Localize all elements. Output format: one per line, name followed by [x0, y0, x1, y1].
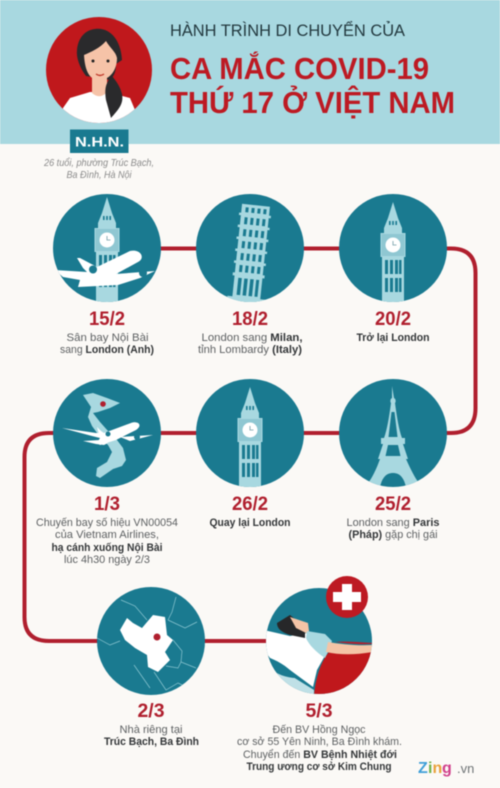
stop 2: 18/2: 18/2	[232, 309, 268, 330]
stop 3: 20/2: Trở lại London	[356, 332, 430, 344]
stop 3: 20/2	[339, 194, 447, 344]
header band	[0, 0, 500, 144]
name tag: N.H.N.	[75, 134, 124, 150]
icon: Hanoi map	[97, 597, 197, 690]
title: HÀNH TRÌNH DI CHUYỂN CỦA	[170, 21, 406, 40]
stop 7: 2/3	[97, 587, 205, 748]
patient details	[43, 157, 154, 181]
stop 2: 18/2	[196, 194, 304, 356]
stop 1: 15/2: Sân bay Nội Bài	[66, 332, 148, 344]
title: THỨ 17 Ở VIỆT NAM	[170, 84, 455, 120]
stop 7: 2/3: Trúc Bạch, Ba Đình	[104, 736, 199, 748]
stop 6: 1/3: Chuyến bay số hiệu VN00054	[36, 517, 178, 529]
stop 4: 25/2: 25/2	[375, 494, 411, 515]
stop 8: 5/3: 5/3	[306, 701, 332, 722]
name tag	[70, 130, 128, 153]
stop 6: 1/3: 1/3	[94, 494, 120, 515]
logo: Zing.vn: Z	[418, 760, 428, 777]
icon: airplane	[55, 251, 155, 287]
stop 7: 2/3: 2/3	[138, 701, 164, 722]
stop 4: 25/2: London sang Paris	[346, 517, 440, 529]
patient details: Ba Đình, Hà Nội	[66, 169, 132, 181]
stop 8: 5/3: Chuyển đến BV Bệnh Nhiệt đới	[243, 749, 397, 761]
stop 7: 2/3: Nhà riêng tại	[120, 724, 182, 736]
logo: Zing.vn: n	[432, 760, 442, 777]
icon: patient in hospital bed	[262, 615, 374, 700]
logo: Zing.vn: .vn	[457, 761, 474, 776]
icon: airplane	[62, 422, 153, 445]
stop 5: 26/2: 26/2	[232, 494, 268, 515]
avatar: patient portrait	[46, 17, 152, 125]
stop 1: 15/2: 15/2	[89, 309, 125, 330]
title	[170, 21, 455, 120]
stop 6: 1/3: hạ cánh xuống Nội Bài	[52, 542, 162, 554]
stop 8: 5/3: cơ sở 55 Yên Ninh, Ba Đình khám.	[237, 736, 402, 748]
stop 1: 15/2: sang London (Anh)	[60, 344, 154, 356]
stop 8: 5/3: Đến BV Hồng Ngọc	[272, 724, 366, 736]
stop 3: 20/2: 20/2	[375, 309, 411, 330]
icon: Eiffel tower	[368, 386, 419, 487]
stop 5: 26/2	[196, 379, 304, 529]
icon: medical cross badge	[326, 576, 368, 618]
icon: map of Vietnam	[83, 393, 126, 478]
title: CA MẮC COVID-19	[170, 50, 429, 86]
stop 6: 1/3	[36, 379, 178, 566]
stop 5: 26/2: Quay lại London	[210, 517, 291, 529]
stop 8: 5/3: Trung ương cơ sở Kim Chung	[246, 761, 392, 773]
stop 4: 25/2	[339, 379, 447, 541]
stop 2: 18/2: London sang Milan,	[202, 332, 302, 344]
route line	[24, 248, 476, 641]
logo: Zing.vn	[418, 760, 474, 777]
stop 6: 1/3: của Vietnam Airlines,	[55, 529, 159, 541]
stop 6: 1/3: lúc 4h30 ngày 2/3	[64, 554, 150, 566]
stop 8: 5/3	[237, 588, 402, 773]
stop 2: 18/2: tỉnh Lombardy (Italy)	[198, 344, 302, 356]
logo: Zing.vn: i	[428, 760, 432, 777]
patient details: 26 tuổi, phường Trúc Bạch,	[43, 157, 154, 169]
stop 1: 15/2	[53, 194, 161, 356]
logo: Zing.vn: g	[442, 760, 452, 777]
icon: leaning tower of Pisa	[227, 203, 275, 306]
stop 4: 25/2: (Pháp) gặp chị gái	[348, 529, 438, 541]
